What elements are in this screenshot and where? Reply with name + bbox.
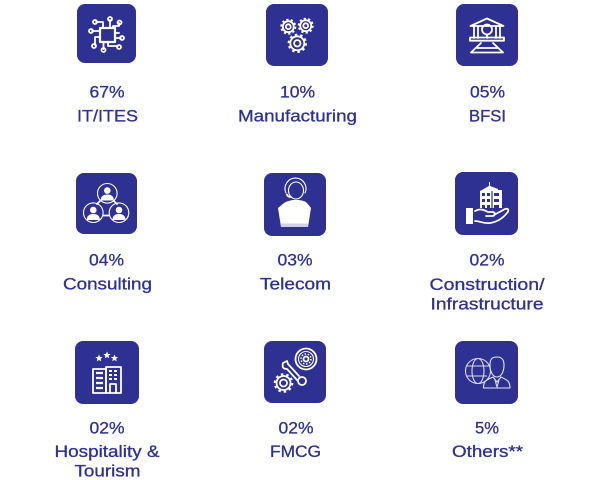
label: 02% Construction/Infrastructure: Infrastructure: [430, 296, 544, 314]
panel: IT/ITES: [77, 4, 138, 126]
label: 02% Hospitality & Tourism: [54, 420, 160, 480]
icon: circuit chip: [77, 4, 136, 63]
icon: hand holding building: [455, 172, 518, 235]
icon: globe and business person: [455, 341, 518, 404]
panel: Others: [452, 341, 524, 461]
icon: call centre agent: [264, 173, 326, 236]
panel: Manufacturing: [238, 4, 357, 126]
label: 02% FMCG: 02%: [278, 420, 314, 438]
label: 10% Manufacturing: Manufacturing: [238, 108, 357, 126]
panel: BFSI: [456, 4, 518, 126]
panel: FMCG: [264, 341, 326, 461]
label: 02% FMCG: FMCG: [270, 443, 321, 461]
icon: connected people: [76, 173, 137, 234]
icon: three gears: [266, 4, 328, 66]
label: 10% Manufacturing: 10%: [280, 84, 315, 102]
label: 02% Hospitality & Tourism: Hospitality &: [54, 443, 160, 461]
label: 5% Others**: 5%: [475, 420, 499, 438]
label: 03% Telecom: Telecom: [260, 276, 331, 294]
label: 67% IT/ITES: IT/ITES: [77, 108, 138, 126]
label: 04% Consulting: Consulting: [63, 276, 152, 294]
label: 02% Construction/Infrastructure: 02%: [470, 252, 505, 270]
label: 02% FMCG: [270, 420, 321, 461]
label: 05% BFSI: [469, 84, 506, 126]
label: 02% Hospitality & Tourism: Tourism: [74, 462, 140, 480]
label: 05% BFSI: BFSI: [469, 108, 506, 126]
label: 67% IT/ITES: [77, 84, 138, 126]
label: 5% Others**: Others**: [452, 443, 524, 461]
label: 5% Others**: [452, 420, 524, 461]
panel: Telecom: [260, 173, 331, 294]
label: 04% Consulting: 04%: [89, 252, 124, 270]
label: 02% Hospitality & Tourism: 02%: [90, 420, 125, 438]
label: 03% Telecom: 03%: [278, 252, 313, 270]
label: 02% Construction/Infrastructure: [430, 252, 545, 314]
label: 03% Telecom: [260, 252, 331, 294]
icon: hotel with stars: [75, 341, 139, 404]
label: 04% Consulting: [63, 252, 152, 294]
label: 05% BFSI: 05%: [470, 84, 505, 102]
panel: Hospitality & Tourism: [54, 341, 160, 480]
label: 10% Manufacturing: [238, 84, 357, 126]
panel: Consulting: [63, 173, 152, 294]
panel: Construction/Infrastructure: [430, 172, 545, 314]
icon: bank building: [456, 4, 518, 66]
label: 67% IT/ITES: 67%: [90, 84, 125, 102]
label: 02% Construction/Infrastructure: Construction/: [430, 276, 545, 294]
icon: wrench, wheel and gear: [264, 341, 326, 403]
